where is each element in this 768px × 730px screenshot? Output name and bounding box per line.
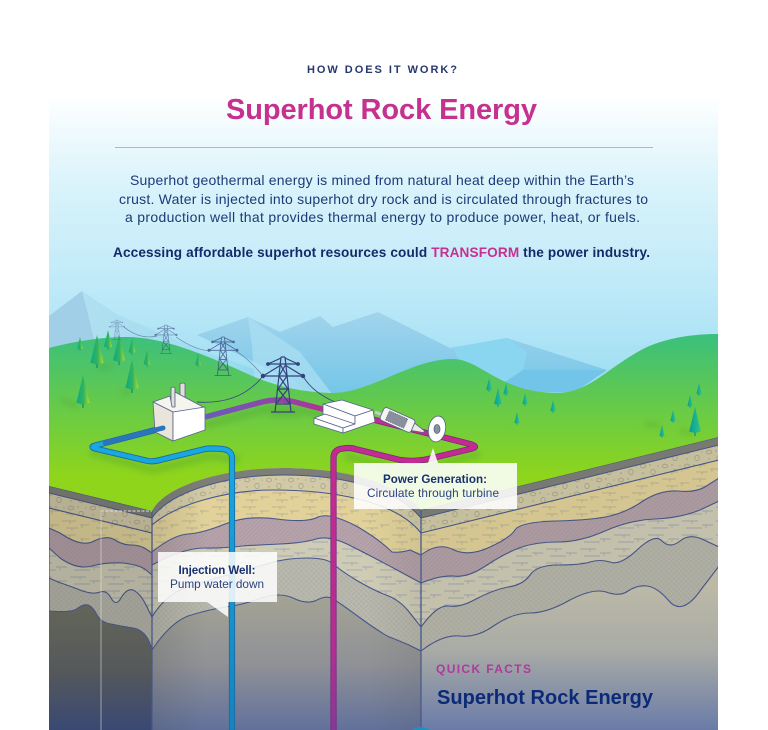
intro paragraph: crust. Water is injected into superhot dry rock and is circulated through fractures to (119, 191, 648, 207)
connecting pipe: purple (205, 400, 330, 417)
callout: injection well: Pump water down (170, 577, 264, 591)
green ground (49, 334, 719, 511)
right rock wall (421, 437, 719, 730)
eyebrow heading: HOW DOES IT WORK? (307, 64, 457, 76)
trees: left hill (76, 330, 201, 408)
main tower (261, 357, 305, 412)
section edge lines (152, 510, 421, 730)
steam pipe: pink (334, 418, 475, 730)
intro paragraph (119, 172, 648, 225)
curved center rock section (152, 460, 421, 730)
icon: turbine (375, 407, 448, 443)
icon: injection plant building (153, 383, 205, 441)
left rock wall (49, 486, 152, 730)
key message: Accessing affordable superhot resources could TRANSFORM the power industry. (113, 245, 650, 260)
divider (115, 147, 653, 148)
callout: injection well (158, 552, 277, 617)
water pipe: blue (92, 428, 232, 730)
infographic: superhot rock energy (49, 66, 718, 730)
sky (49, 95, 718, 495)
mountains (49, 291, 607, 402)
intro paragraph: Superhot geothermal energy is mined from natural heat deep within the Earth’s (130, 172, 634, 188)
trees: right hills (486, 378, 702, 438)
blue pipe entry (155, 428, 163, 430)
cutaway outline (101, 511, 152, 730)
intro paragraph: a production well that provides thermal energy to produce power, heat, or fuels. (125, 209, 640, 225)
callout: power generation (354, 448, 517, 509)
quick facts heading: Superhot Rock Energy (437, 687, 654, 709)
water well cover (412, 727, 430, 730)
callout: injection well: Injection Well: (178, 564, 256, 577)
pipe and tree shadows (62, 366, 692, 470)
icon: generator building (314, 400, 375, 433)
title: Superhot Rock Energy (226, 94, 537, 126)
callout: power generation: Power Generation: (383, 473, 487, 486)
callout: power generation: Circulate through turbine (367, 486, 499, 500)
scene panel (49, 95, 719, 730)
quick facts label: QUICK FACTS (436, 662, 531, 676)
transmission towers and wires (109, 320, 335, 402)
